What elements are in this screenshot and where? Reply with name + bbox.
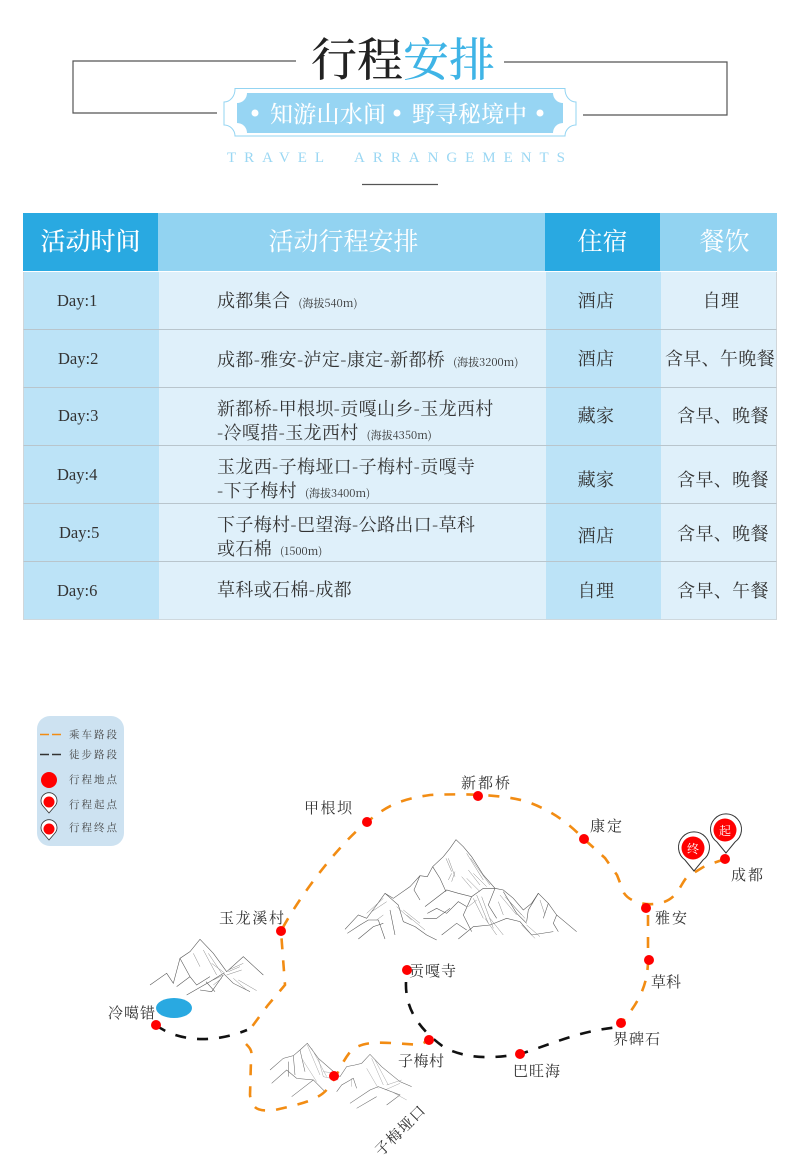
header frame <box>73 61 727 115</box>
ribbon badge: 知游山水间 <box>270 96 386 129</box>
lodging day 4: 藏家 <box>578 466 614 492</box>
place labels: 子梅村 <box>398 1050 444 1071</box>
table header: lodging <box>545 213 660 271</box>
legend: end: 行程终点 <box>69 820 118 835</box>
meals day 5: 含早、晚餐 <box>677 520 769 546</box>
meals day 3: 含早、晚餐 <box>677 402 769 428</box>
itinerary day 4 <box>217 453 475 503</box>
day 5: Day:5 <box>59 523 99 542</box>
meals day 4: 含早、晚餐 <box>677 466 769 492</box>
place labels: 甲根坝 <box>304 797 353 818</box>
itinerary day 6: 草科或石棉-成都 <box>217 576 352 602</box>
meals day 6: 含早、午餐 <box>677 577 769 603</box>
end pin <box>679 832 710 871</box>
row 2 <box>23 330 777 388</box>
route stops <box>151 791 730 1081</box>
itinerary day 1: 成都集合 (海拔540m) <box>217 287 357 313</box>
end pin: 终 <box>687 840 699 857</box>
place labels: 草科 <box>651 971 681 992</box>
place labels <box>108 772 763 1161</box>
itinerary day 3: -冷嘎措-玉龙西村 (海拔4350m) <box>217 419 432 445</box>
legend: driving: 乘车路段 <box>69 727 118 742</box>
itinerary day 4: -下子梅村 (海拔3400m) <box>217 477 370 503</box>
table header: lodging: 住宿 <box>577 222 628 258</box>
place labels: 雅安 <box>655 907 687 928</box>
lake <box>156 998 192 1018</box>
itinerary day 5: 下子梅村-巴望海-公路出口-草科 <box>217 511 475 537</box>
legend: start: 行程起点 <box>69 797 118 812</box>
start pin <box>710 814 741 853</box>
day 1: Day:1 <box>57 291 97 310</box>
ribbon badge: 野寻秘境中 <box>412 96 527 129</box>
table header: itinerary <box>158 213 545 271</box>
row 6 <box>23 562 777 620</box>
title: 行程安排 <box>311 24 495 90</box>
place labels: 康定 <box>590 815 622 836</box>
place labels: 贡嘎寺 <box>409 960 456 981</box>
day 6: Day:6 <box>57 581 97 600</box>
place labels: 子梅垭口 <box>370 1100 430 1161</box>
legend <box>37 716 124 846</box>
row 5 <box>23 504 777 562</box>
lodging day 2: 酒店 <box>578 345 614 371</box>
mountain: near pass <box>270 1043 412 1108</box>
day 3: Day:3 <box>58 406 98 425</box>
table header: time <box>23 213 158 271</box>
lodging day 1: 酒店 <box>578 287 614 313</box>
hiking route <box>156 982 621 1057</box>
mountain: central range <box>345 840 577 940</box>
table header: meals: 餐饮 <box>699 222 750 258</box>
lodging day 5: 酒店 <box>578 522 614 548</box>
place labels: 界碑石 <box>613 1028 660 1049</box>
row 3 <box>23 388 777 446</box>
itinerary day 4: 玉龙西-子梅垭口-子梅村-贡嘎寺 <box>217 453 475 479</box>
lodging day 3: 藏家 <box>578 402 614 428</box>
place labels: 新都桥 <box>461 772 510 793</box>
day 4: Day:4 <box>57 465 97 484</box>
english subtitle: TRAVEL ARRANGEMENTS <box>227 150 565 166</box>
place labels: 巴旺海 <box>513 1060 560 1081</box>
row 4 <box>23 446 777 504</box>
place labels: 冷噶错 <box>108 1002 155 1023</box>
header banner <box>72 24 728 186</box>
lodging day 6: 自理 <box>578 577 614 603</box>
meals day 2: 含早、午晚餐 <box>665 345 775 371</box>
place labels: 成都 <box>731 864 763 885</box>
itinerary day 3 <box>217 395 494 445</box>
meals day 1: 自理 <box>703 287 739 313</box>
ribbon badge <box>224 88 576 136</box>
itinerary day 5 <box>217 511 475 561</box>
legend: stop: 行程地点 <box>69 772 118 787</box>
itinerary day 5: 或石棉 (1500m) <box>217 535 322 561</box>
place labels: 玉龙溪村 <box>219 907 284 928</box>
start pin: 起 <box>719 822 731 839</box>
day 2: Day:2 <box>58 349 98 368</box>
table header: time: 活动时间 <box>40 222 140 258</box>
itinerary day 2: 成都-雅安-泸定-康定-新都桥 (海拔3200m) <box>217 346 518 372</box>
itinerary day 3: 新都桥-甲根坝-贡嘎山乡-玉龙西村 <box>217 395 494 421</box>
legend: hiking: 徒步路段 <box>69 747 118 762</box>
table header: itinerary: 活动行程安排 <box>268 222 418 258</box>
row 1 <box>23 272 777 330</box>
table header: meals <box>660 213 777 271</box>
driving route <box>246 794 725 1110</box>
mountain: left of lake <box>150 939 263 995</box>
